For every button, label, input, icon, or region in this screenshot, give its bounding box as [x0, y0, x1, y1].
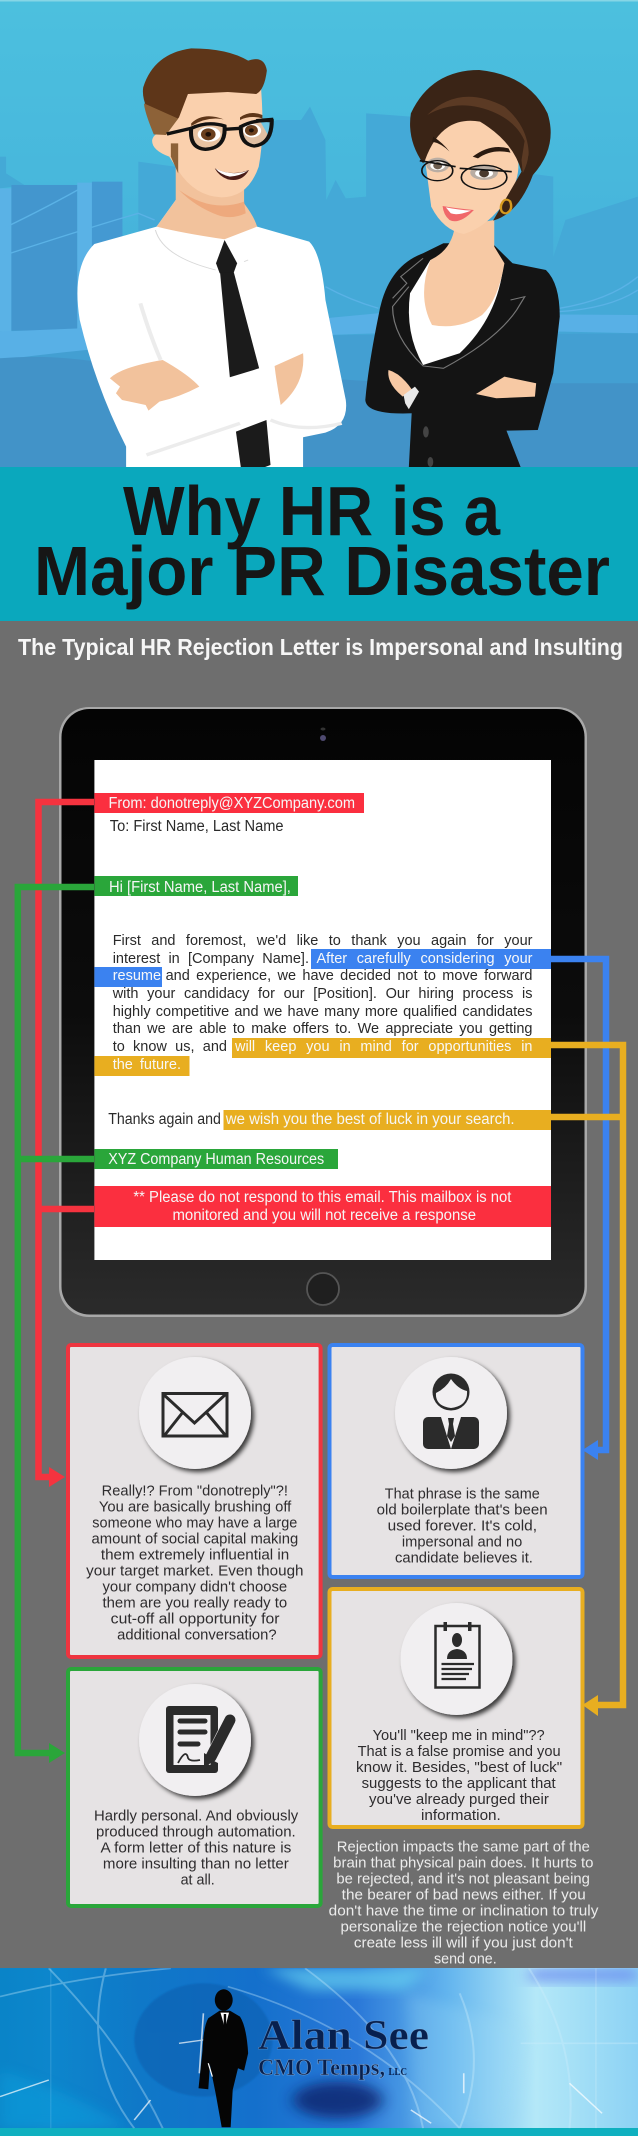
closing paragraph: Rejection impacts the same part of the: [337, 1840, 590, 1856]
footer banner: [0, 1968, 638, 2136]
card text: know it. Besides, "best of luck": [356, 1760, 562, 1776]
card text: amount of social capital making: [92, 1532, 298, 1548]
closing paragraph: the bearer of bad news either. If you: [342, 1888, 586, 1904]
tablet: [59, 707, 587, 1317]
closing paragraph: be rejected, and it's not pleasant being: [336, 1872, 590, 1888]
card: yellow, keep me in mind: [330, 1589, 582, 1827]
connector: red: [38, 802, 94, 1487]
card text: You'll "keep me in mind"??: [373, 1728, 545, 1744]
card text: Hardly personal. And obviously: [94, 1809, 299, 1825]
card text: impersonal and no: [402, 1534, 522, 1550]
logo: company name: [258, 2013, 429, 2080]
letter header and sign-off text: Hi [First Name, Last Name],: [109, 879, 291, 896]
card text: more insulting than no letter: [103, 1857, 289, 1873]
icon circle: [139, 1684, 251, 1796]
title band: [0, 467, 638, 621]
card text: candidate believes it.: [395, 1550, 533, 1566]
letter body text: with your candidacy for our [Position]. Our hiring process is: [113, 986, 532, 1002]
logo: company name: Alan See: [258, 2013, 429, 2059]
letter body text: highly competitive and we have many more qualified candidates: [113, 1004, 532, 1020]
letter header and sign-off text: [108, 795, 515, 1224]
card text: your company didn't choose: [102, 1580, 287, 1596]
connector: yellow: [551, 1045, 623, 1716]
letter header and sign-off text: XYZ Company Human Resources: [108, 1151, 324, 1168]
icon: resume: [436, 1622, 480, 1688]
card text: [377, 1486, 548, 1566]
icon circle: [395, 1357, 507, 1469]
letter header and sign-off text: To: First Name, Last Name: [110, 818, 284, 835]
card text: someone who may have a large: [92, 1516, 297, 1532]
card: green, hardly personal: [68, 1669, 321, 1906]
letter header and sign-off text: Thanks again and: [108, 1111, 221, 1128]
man: [77, 48, 346, 467]
closing paragraph: don't have the time or inclination to truly: [329, 1904, 599, 1920]
icon circle: [400, 1603, 512, 1715]
letter body text: interest in [Company Name].: [113, 951, 309, 967]
hero illustration: [0, 0, 638, 467]
letter body text: After carefully considering your: [316, 951, 532, 967]
card text: You are basically brushing off: [99, 1500, 292, 1516]
closing paragraph: send one.: [434, 1952, 497, 1968]
letter body text: to know us, and: [113, 1039, 227, 1055]
icon circle: [139, 1357, 251, 1469]
card text: Really!? From "donotreply"?!: [102, 1484, 288, 1500]
card text: them are you really ready to: [102, 1596, 287, 1612]
letter body text: the future.: [113, 1057, 181, 1073]
card: red, donotreply: [68, 1345, 321, 1657]
closing paragraph: create less ill will if you just don't: [354, 1936, 573, 1952]
letter header and sign-off text: we wish you the best of luck in your search.: [225, 1111, 515, 1128]
icon: businessman: [423, 1374, 479, 1449]
letter body text: [112, 933, 532, 1073]
connector: green: [18, 887, 94, 1763]
closing paragraph: brain that physical pain does. It hurts to: [333, 1856, 594, 1872]
letter highlights: [94, 793, 551, 1227]
card text: produced through automation.: [96, 1825, 296, 1841]
card text: information.: [421, 1808, 501, 1824]
logo: company name: CMO Temps,: [258, 2055, 385, 2080]
home button: [307, 1273, 339, 1305]
city skyline: [0, 107, 638, 332]
card text: [86, 1484, 304, 1644]
water band: [0, 313, 638, 360]
camera: [320, 728, 326, 741]
letter body text: and experience, we have decided not to move forward: [166, 968, 532, 984]
card text: A form letter of this nature is: [100, 1841, 291, 1857]
letter body text: than we are able to make offers to. We appreciate you getting: [113, 1021, 532, 1037]
card: blue, boilerplate: [330, 1345, 582, 1577]
card text: [356, 1728, 562, 1824]
logo: walking businessman: [199, 1989, 248, 2127]
card text: used forever. It's cold,: [388, 1518, 537, 1534]
card text: cut-off all opportunity for: [111, 1612, 280, 1628]
title: [34, 472, 610, 610]
logo: company name: LLC: [388, 2067, 407, 2078]
title: Major PR Disaster: [34, 532, 610, 610]
card text: additional conversation?: [117, 1628, 277, 1644]
icon: signed document: [166, 1706, 232, 1773]
card text: old boilerplate that's been: [377, 1502, 548, 1518]
letter body text: First and foremost, we'd like to thank you again for your: [113, 933, 532, 949]
card text: suggests to the applicant that: [362, 1776, 556, 1792]
card text: That phrase is the same: [385, 1486, 540, 1502]
letter header and sign-off text: From: donotreply@XYZCompany.com: [108, 795, 355, 812]
card text: at all.: [181, 1873, 215, 1889]
title: Why HR is a: [123, 472, 501, 550]
connector: blue: [551, 959, 606, 1460]
woman: [365, 70, 560, 467]
letter body text: will keep you in mind for opportunities in: [235, 1039, 532, 1055]
letter header and sign-off text: monitored and you will not receive a response: [172, 1207, 476, 1224]
letter body text: resume: [113, 968, 161, 984]
card text: you've already purged their: [369, 1792, 549, 1808]
letter header and sign-off text: ** Please do not respond to this email. This mailbox is not: [133, 1189, 512, 1206]
card text: your target market. Even though: [86, 1564, 304, 1580]
card text: That is a false promise and you: [358, 1744, 561, 1760]
card text: [94, 1809, 299, 1889]
closing paragraph: personalize the rejection notice you'll: [340, 1920, 586, 1936]
icon: envelope: [163, 1394, 227, 1436]
card text: them extremely influential in: [101, 1548, 289, 1564]
screen: [94, 760, 551, 1260]
closing paragraph: [329, 1840, 599, 1968]
